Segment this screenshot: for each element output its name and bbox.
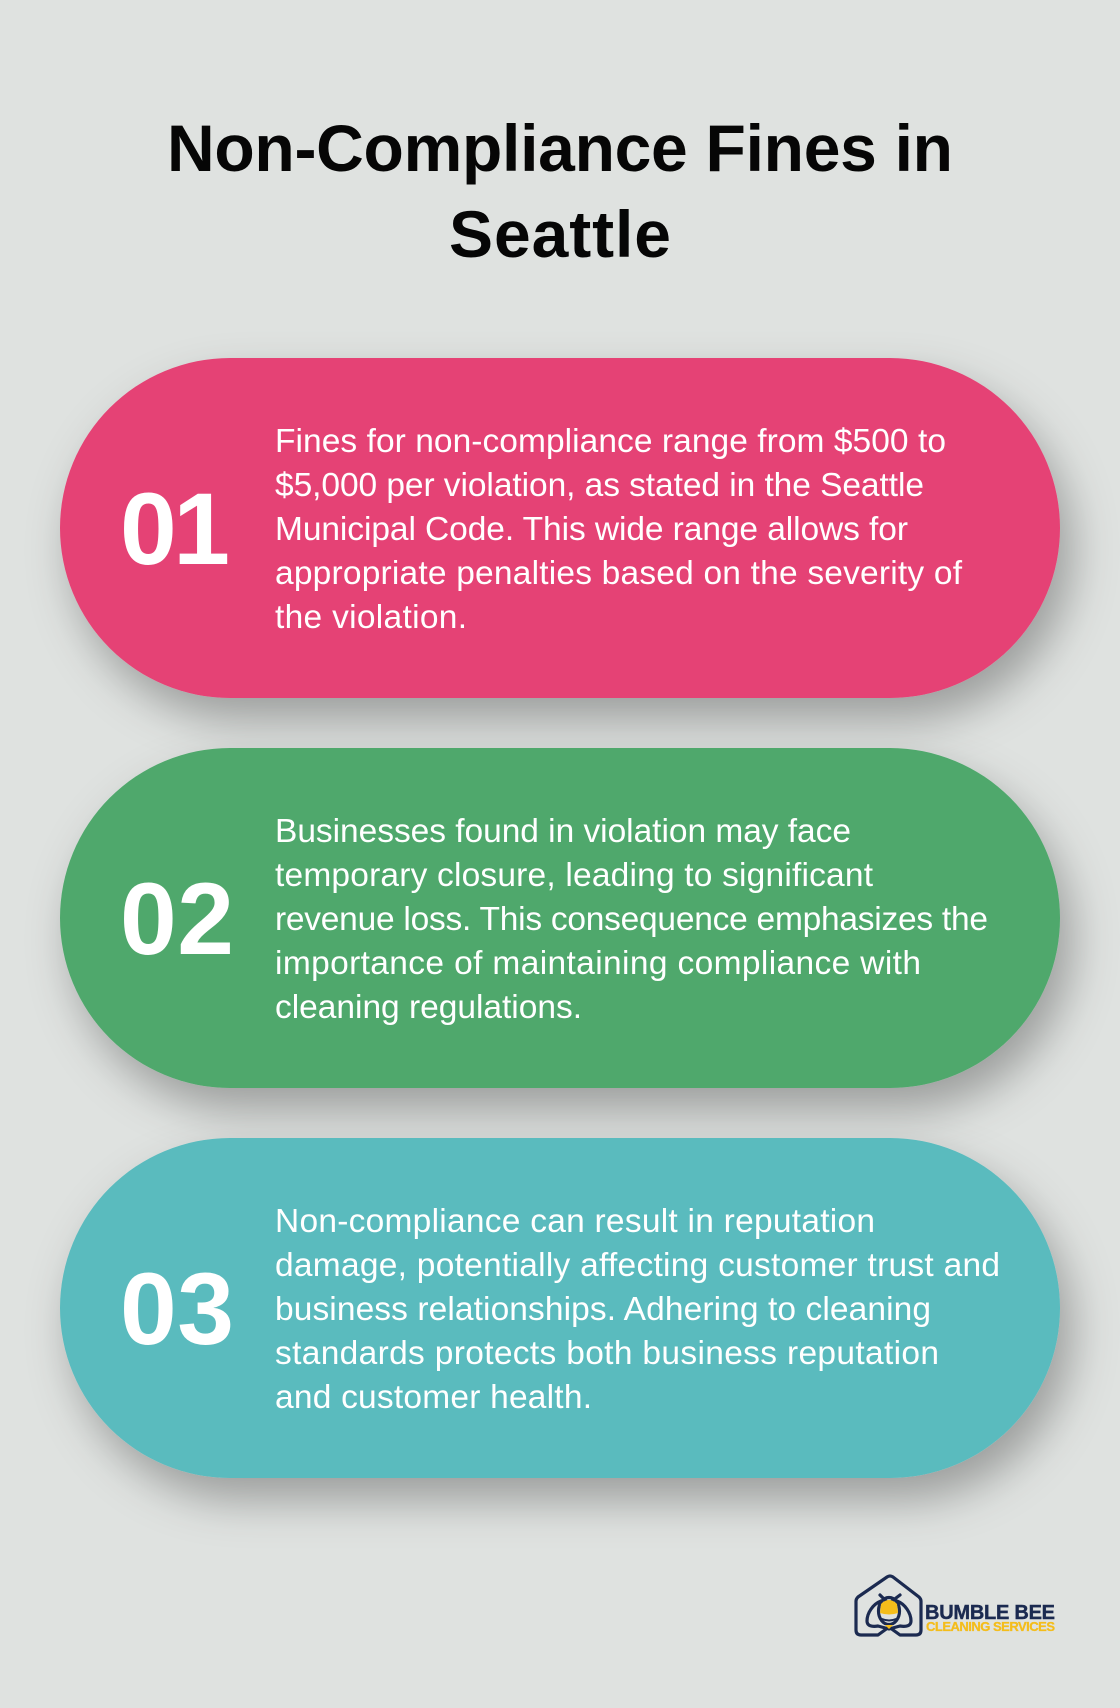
text: closure description: importance of maintaining compliance with: [275, 945, 921, 982]
panel: fines: [60, 358, 1060, 698]
text: reputation description: Non-compliance can result in reputation: [275, 1203, 875, 1240]
text: fines description: $5,000 per violation, as stated in the Seattle: [275, 467, 924, 504]
logo: Bumble Bee Cleaning Services: [856, 1576, 1055, 1635]
title: Seattle: [449, 197, 671, 271]
pill: green background: [60, 748, 1060, 1088]
text: fines description: Municipal Code. This wide range allows for: [275, 511, 908, 548]
text: reputation description: business relationships. Adhering to cleaning: [275, 1291, 931, 1328]
pill: teal background: [60, 1138, 1060, 1478]
icon: house with bee: [856, 1576, 921, 1635]
text: closure description: Businesses found in violation may face: [275, 813, 851, 850]
logo tagline: CLEANING SERVICES: [926, 1619, 1055, 1634]
number 02: 02: [120, 862, 234, 976]
text: reputation description: damage, potentially affecting customer trust and: [275, 1247, 1000, 1284]
panel: reputation: [60, 1138, 1060, 1478]
text: closure description: cleaning regulations.: [275, 989, 582, 1026]
text: fines description: [275, 423, 963, 636]
title: Non-Compliance Fines in: [167, 111, 953, 185]
title: [167, 111, 953, 271]
number 03: 03: [120, 1252, 234, 1366]
text: reputation description: standards protects both business reputation: [275, 1335, 939, 1372]
text: reputation description: [275, 1203, 1000, 1416]
text: fines description: the violation.: [275, 599, 467, 636]
text: closure description: revenue loss. This consequence emphasizes the: [275, 901, 988, 938]
pill: pink background: [60, 358, 1060, 698]
panel: closure: [60, 748, 1060, 1088]
text: closure description: temporary closure, leading to significant: [275, 857, 874, 894]
text: fines description: appropriate penalties based on the severity of: [275, 555, 963, 592]
text: reputation description: and customer health.: [275, 1379, 592, 1416]
logo name: BUMBLE BEE: [925, 1602, 1055, 1624]
text: fines description: Fines for non-compliance range from $500 to: [275, 423, 946, 460]
number 01: 01: [120, 472, 230, 586]
text: closure description: [275, 813, 988, 1026]
